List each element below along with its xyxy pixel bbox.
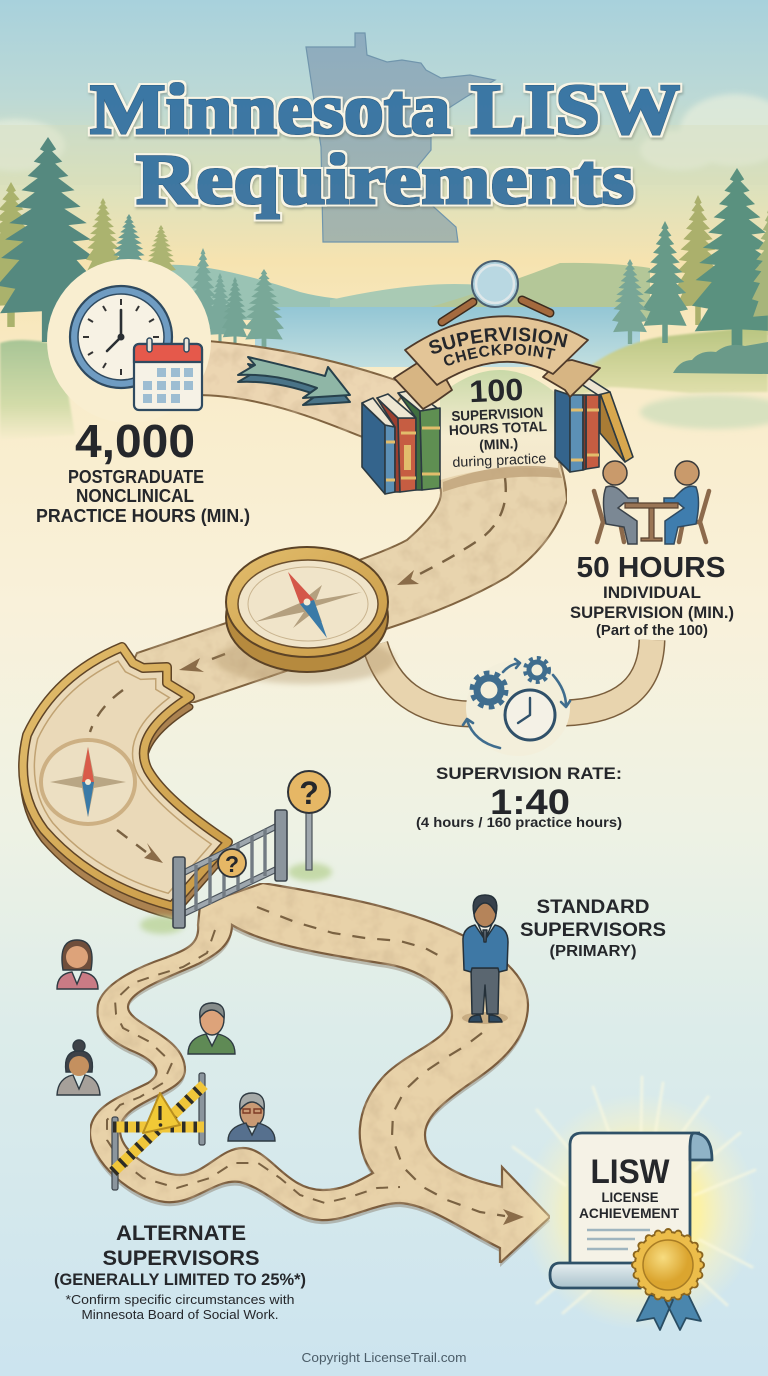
banner text: CHECKPOINT xyxy=(444,344,556,366)
finish arrow mark xyxy=(503,1209,524,1225)
title: Requirements xyxy=(136,141,634,219)
text block: supervision rate: (4 hours / 160 practice hours) xyxy=(416,814,622,830)
copyright: Copyright LicenseTrail.com xyxy=(302,1351,466,1365)
avatar: man in green jacket xyxy=(188,1003,235,1054)
head xyxy=(474,899,496,927)
text block: standard supervisors: SUPERVISORS xyxy=(520,919,666,941)
compass road surface xyxy=(23,647,228,906)
compass: large xyxy=(215,547,395,684)
tape xyxy=(113,1085,204,1172)
left book stack xyxy=(362,390,440,494)
shoes xyxy=(469,1015,502,1022)
text block: alternate supervisors: SUPERVISORS xyxy=(102,1247,260,1270)
supervision checkpoint arch xyxy=(361,260,634,495)
scroll text: ACHIEVEMENT xyxy=(579,1206,680,1221)
hills xyxy=(165,263,650,320)
scroll text: LISW xyxy=(590,1153,670,1191)
torso xyxy=(463,925,508,972)
text block: supervision rate: 1:40 xyxy=(490,783,570,822)
sign xyxy=(288,771,330,870)
text block: alternate supervisors: ALTERNATE xyxy=(116,1222,246,1245)
text block: 50 hours: SUPERVISION (MIN.) xyxy=(570,603,734,622)
gate with question signs xyxy=(140,771,332,934)
text block: 4,000 practice hours xyxy=(36,415,250,526)
left branch dashes xyxy=(107,930,400,1203)
Minnesota state silhouette xyxy=(306,33,495,242)
grass patches xyxy=(140,863,332,934)
title xyxy=(90,71,680,219)
compass road depth xyxy=(23,657,228,916)
legs xyxy=(471,968,499,1014)
100 hours text: during practice xyxy=(452,450,547,470)
banner xyxy=(405,316,588,385)
compass shadow xyxy=(215,636,395,684)
100 hours text xyxy=(447,371,549,470)
title: Minnesota LISW xyxy=(90,71,680,149)
compass needle xyxy=(288,572,314,604)
warning triangle xyxy=(143,1093,180,1133)
compass body xyxy=(226,562,388,672)
100 hours text: HOURS TOTAL xyxy=(449,418,548,438)
magnifying glass xyxy=(442,261,550,322)
text block: 4,000 practice hours: NONCLINICAL xyxy=(76,486,194,506)
person: standard supervisor xyxy=(462,895,508,1024)
glow and rays xyxy=(513,1077,758,1330)
road shadow at arch foot xyxy=(443,466,562,492)
LISW license achievement scroll xyxy=(513,1077,758,1330)
right person xyxy=(664,461,699,544)
cycle arrows xyxy=(463,659,570,748)
gate question badge: ? xyxy=(225,851,239,877)
ribbon xyxy=(637,1290,701,1330)
scenery: sky, hills, lake, pines xyxy=(0,94,768,440)
direction arrow xyxy=(238,357,350,405)
horizon band xyxy=(0,125,768,185)
text block: 50 hours xyxy=(570,552,734,639)
text block: supervision rate: SUPERVISION RATE: xyxy=(436,765,622,783)
road: start to checkpoint xyxy=(195,340,410,440)
text block: alternate supervisors xyxy=(54,1222,306,1322)
curl xyxy=(690,1133,712,1160)
table xyxy=(625,503,678,541)
compass star xyxy=(255,585,362,628)
lower road with fork xyxy=(90,883,550,1267)
road dashes xyxy=(90,690,146,852)
icon: two people at table xyxy=(594,461,709,544)
cream circle xyxy=(47,259,211,423)
posts xyxy=(112,1073,205,1190)
scroll text xyxy=(579,1153,680,1221)
avatar: woman with brown hair xyxy=(57,940,98,989)
clock xyxy=(70,286,172,388)
text block: 50 hours: 50 HOURS xyxy=(576,552,726,584)
text block: alternate supervisors: (GENERALLY LIMITED TO 25%*) xyxy=(54,1271,306,1289)
text block: alternate supervisors: Minnesota Board of Social Work. xyxy=(82,1307,278,1322)
lake xyxy=(255,307,640,367)
lakeshore land left xyxy=(0,340,75,440)
banner text: SUPERVISION xyxy=(429,327,568,354)
clouds xyxy=(0,94,768,171)
avatar: older man with glasses xyxy=(228,1093,275,1141)
text block: alternate supervisors: *Confirm specific circumstances with xyxy=(66,1292,294,1307)
text block: standard supervisors: STANDARD xyxy=(536,896,650,918)
road: checkpoint to compass xyxy=(330,462,567,640)
bottom roll xyxy=(550,1263,640,1288)
text block: standard supervisors: (PRIMARY) xyxy=(550,943,636,960)
paper xyxy=(570,1133,700,1270)
right branch dashes xyxy=(257,907,447,960)
road: side path to 50 hours xyxy=(375,640,652,714)
arch interior glow xyxy=(440,370,558,480)
text block: 4,000 practice hours: POSTGRADUATE xyxy=(68,467,204,487)
text block: standard supervisors xyxy=(520,896,666,960)
top gear xyxy=(525,658,549,682)
icon: gears, clock and cycle arrows xyxy=(463,658,570,756)
100 hours text: SUPERVISION xyxy=(451,404,544,424)
small compass xyxy=(41,740,135,824)
lakeshore land right xyxy=(560,325,768,429)
left gear xyxy=(472,673,506,707)
road: compass to broken compass xyxy=(120,620,295,703)
text block: 4,000 practice hours: PRACTICE HOURS (MIN.) xyxy=(36,506,250,526)
seal xyxy=(635,1232,701,1298)
shrubs xyxy=(673,342,768,374)
clock and calendar icon xyxy=(47,259,211,423)
clock xyxy=(505,690,555,740)
background disc xyxy=(466,660,570,756)
text block: supervision rate xyxy=(416,765,622,830)
scroll text: LICENSE xyxy=(602,1190,658,1205)
compass trail segment xyxy=(23,647,228,916)
gate question badge xyxy=(218,849,246,877)
100 hours text: 100 xyxy=(469,372,524,409)
avatar: woman with hair bun xyxy=(57,1040,100,1095)
banner tails xyxy=(394,360,600,409)
text block: 50 hours: INDIVIDUAL xyxy=(603,583,701,602)
text block: 50 hours: (Part of the 100) xyxy=(596,623,708,639)
left person xyxy=(603,461,638,544)
100 hours text: (MIN.) xyxy=(479,435,518,453)
right book stack xyxy=(555,376,633,472)
calendar xyxy=(134,338,202,410)
warning barrier xyxy=(112,1073,205,1190)
paper lines xyxy=(587,1230,650,1249)
road arrow xyxy=(144,843,163,863)
gate posts xyxy=(173,810,287,928)
text block: 4,000 practice hours: 4,000 xyxy=(75,415,195,467)
compass road rim xyxy=(23,647,228,906)
pine trees xyxy=(0,137,768,358)
chairs xyxy=(594,491,709,542)
sign: ? xyxy=(299,775,319,811)
rails and bars xyxy=(185,823,277,916)
inner guide line xyxy=(34,660,212,894)
